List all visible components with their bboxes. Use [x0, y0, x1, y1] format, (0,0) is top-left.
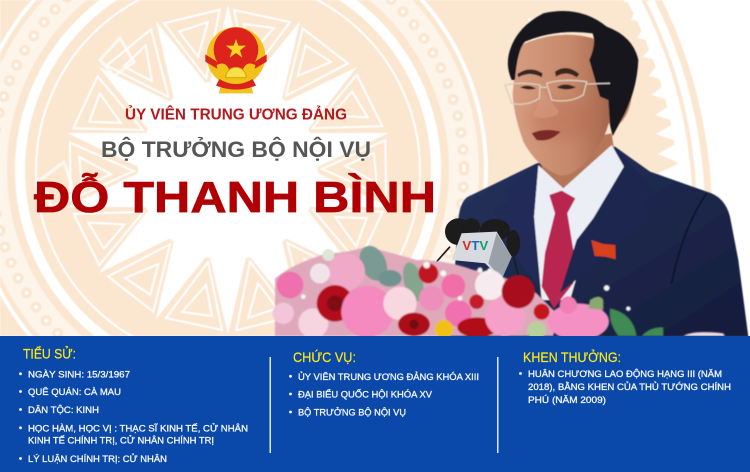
column: awards: HUÂN CHƯƠNG LAO ĐỘNG HẠNG III (NĂM [528, 368, 722, 380]
column: positions: ỦY VIÊN TRUNG ƯƠNG ĐẢNG KHÓA XIII [298, 371, 479, 383]
column: positions: BỘ TRƯỞNG BỘ NỘI VỤ [298, 406, 406, 418]
column: biography [19, 344, 248, 465]
panel: biography footer [0, 336, 750, 472]
column: biography: HỌC HÀM, HỌC VỊ : THẠC SĨ KINH TẾ, CỬ NHÂN [28, 422, 248, 434]
column: biography: KINH TẾ CHÍNH TRỊ, CỬ NHÂN CHÍNH TRỊ [28, 434, 214, 446]
party pin [591, 240, 616, 259]
icon: national emblem [205, 27, 267, 93]
lapels [560, 147, 655, 293]
hair [508, 11, 638, 136]
column: positions [289, 349, 479, 418]
face [513, 35, 612, 175]
jacket [450, 147, 748, 337]
ear [608, 86, 632, 126]
column: awards: PHÚ (NĂM 2009) [528, 395, 606, 406]
VTV cube [452, 232, 512, 279]
glasses [505, 80, 610, 104]
column: biography: DÂN TỘC: KINH [28, 404, 99, 416]
microphones [437, 218, 520, 282]
shirt [534, 145, 624, 300]
column: awards [519, 348, 731, 406]
heading: minister role: BỘ TRƯỞNG BỘ NỘI VỤ [101, 137, 371, 162]
column: awards: KHEN THƯỞNG: [523, 348, 621, 365]
brows, eyes and nose [517, 68, 579, 77]
mouth [532, 130, 561, 141]
heading: name: ĐỖ THANH BÌNH [34, 171, 436, 222]
flower bouquet [273, 241, 725, 340]
tie [542, 191, 575, 308]
column: biography: LÝ LUẬN CHÍNH TRỊ: CỬ NHÂN [28, 453, 167, 465]
cheek shading [530, 100, 597, 140]
neck [538, 133, 615, 197]
column: biography: NGÀY SINH: 15/3/1967 [28, 369, 130, 380]
column: biography: TIỂU SỬ: [23, 344, 76, 362]
portrait: speaker [450, 11, 748, 337]
column: positions: ĐẠI BIỂU QUỐC HỘI KHÓA XV [298, 388, 433, 400]
column: awards: 2018), BẰNG KHEN CỦA THỦ TƯỚNG CHÍNH [528, 381, 731, 393]
column: biography: QUÊ QUÁN: CÀ MAU [28, 387, 121, 398]
heading: party role: ỦY VIÊN TRUNG ƯƠNG ĐẢNG [125, 106, 347, 124]
column: positions: CHỨC VỤ: [293, 349, 356, 365]
microphones: VTV [462, 238, 488, 253]
